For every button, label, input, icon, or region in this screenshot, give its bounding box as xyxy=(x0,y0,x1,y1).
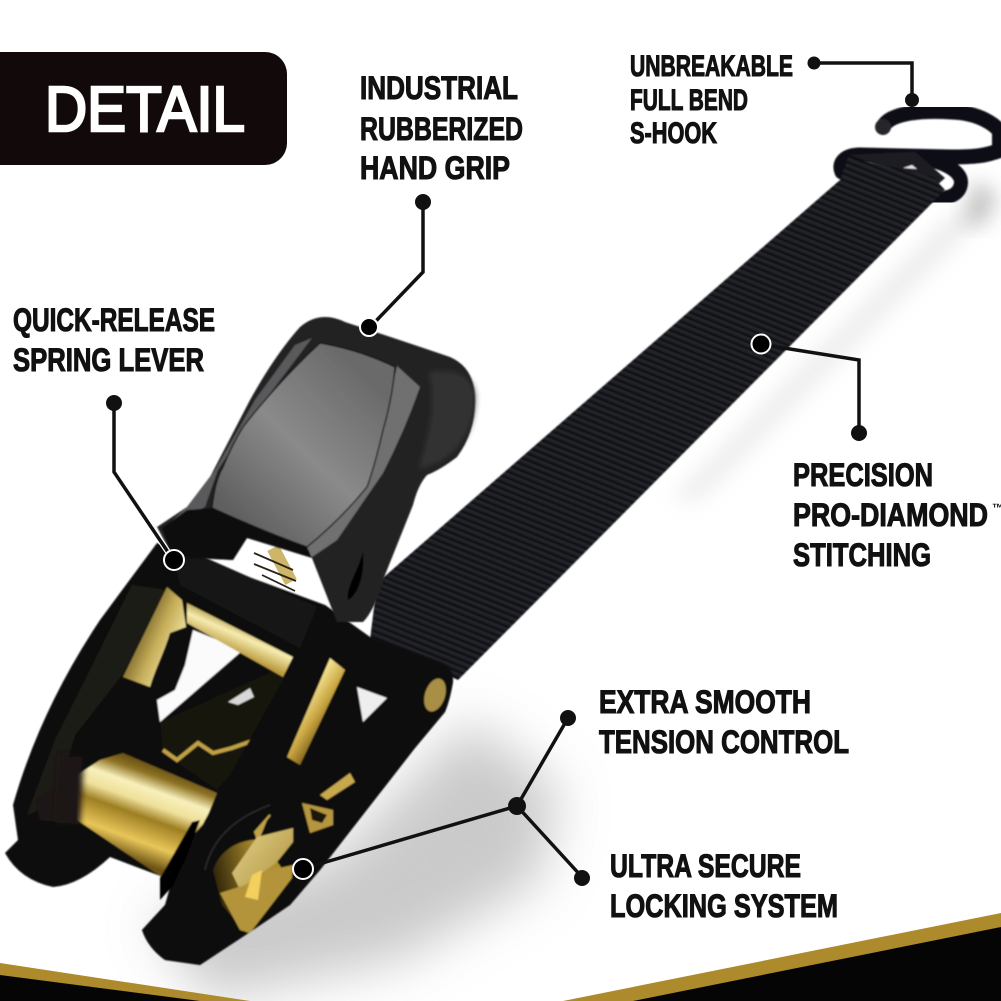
title banner: DETAIL xyxy=(45,73,245,145)
roller end flange xyxy=(160,820,200,900)
right side plate and arm xyxy=(142,605,453,965)
label: industrial rubberized hand grip: RUBBERIZED xyxy=(360,111,523,147)
label: precision pro-diamond stitching: STITCHING xyxy=(793,537,931,573)
bottom gold and black band xyxy=(0,913,1001,1001)
label: extra smooth tension control: EXTRA SMOOTH xyxy=(599,684,811,720)
lower flange xyxy=(220,865,293,933)
ratchet mechanism xyxy=(5,543,453,965)
title banner xyxy=(0,52,287,165)
gold top bar xyxy=(187,603,293,677)
label: ultra secure locking system xyxy=(610,848,838,924)
ratchet silhouette xyxy=(5,543,453,965)
nylon strap xyxy=(370,157,945,680)
upper flange xyxy=(232,828,293,890)
grip end cap xyxy=(418,371,475,470)
middle crossbar xyxy=(160,668,285,790)
gold clip xyxy=(255,815,270,840)
label: quick-release spring lever xyxy=(13,302,215,378)
label: extra smooth tension control xyxy=(599,684,849,760)
callout: hand grip leader xyxy=(360,194,431,336)
label: unbreakable full bend s-hook xyxy=(630,50,793,150)
label: industrial rubberized hand grip: INDUSTRIAL xyxy=(360,70,518,106)
grip base bar xyxy=(173,553,317,648)
label: quick-release spring lever: SPRING LEVER xyxy=(13,342,204,378)
left lower inner wall xyxy=(35,770,85,825)
label: ultra secure locking system: LOCKING SYSTEM xyxy=(610,888,838,924)
grip pad xyxy=(212,343,395,547)
rivet xyxy=(420,676,450,714)
label: extra smooth tension control: TENSION CONTROL xyxy=(599,724,849,760)
spring xyxy=(254,548,296,591)
grip left bevel xyxy=(165,338,312,527)
callout: tension and locking leaders xyxy=(293,710,590,886)
crossbar glint xyxy=(228,688,254,705)
label: precision pro-diamond stitching xyxy=(793,457,1001,573)
callout: spring lever leader xyxy=(106,395,184,570)
axle disc xyxy=(205,805,270,870)
label: industrial rubberized hand grip xyxy=(360,70,523,186)
white opening xyxy=(157,630,243,722)
axle body xyxy=(213,840,290,933)
cast shadows xyxy=(150,180,998,1000)
label: industrial rubberized hand grip: HAND GRIP xyxy=(360,150,510,186)
rubber hand grip xyxy=(157,317,475,622)
grip lower shade xyxy=(162,508,312,560)
gold roller xyxy=(77,753,217,878)
callout: stitching leader xyxy=(752,334,867,441)
arm triangular opening xyxy=(357,687,387,722)
roller left shade xyxy=(55,755,84,825)
gold u piece xyxy=(123,587,186,687)
callout: s-hook leader xyxy=(808,56,919,107)
left inner textured wall xyxy=(27,585,166,815)
axle glint xyxy=(245,870,262,900)
gold slot bar xyxy=(287,658,345,765)
grip right bevel xyxy=(307,366,420,557)
lock block inner xyxy=(310,808,327,823)
label: ultra secure locking system: ULTRA SECURE xyxy=(610,848,801,884)
s-hook xyxy=(841,111,1001,198)
grip teardrop notch xyxy=(348,552,363,600)
label: unbreakable full bend s-hook: UNBREAKABLE xyxy=(630,50,793,83)
label: unbreakable full bend s-hook: FULL BEND xyxy=(630,84,748,117)
label: precision pro-diamond stitching: PRECISION xyxy=(793,457,933,493)
label: quick-release spring lever: QUICK-RELEASE xyxy=(13,302,215,338)
lock block xyxy=(302,803,333,833)
small gold lock pieces xyxy=(320,773,355,800)
pawl teeth gold edge xyxy=(163,741,252,760)
label: unbreakable full bend s-hook: S-HOOK xyxy=(630,117,717,150)
